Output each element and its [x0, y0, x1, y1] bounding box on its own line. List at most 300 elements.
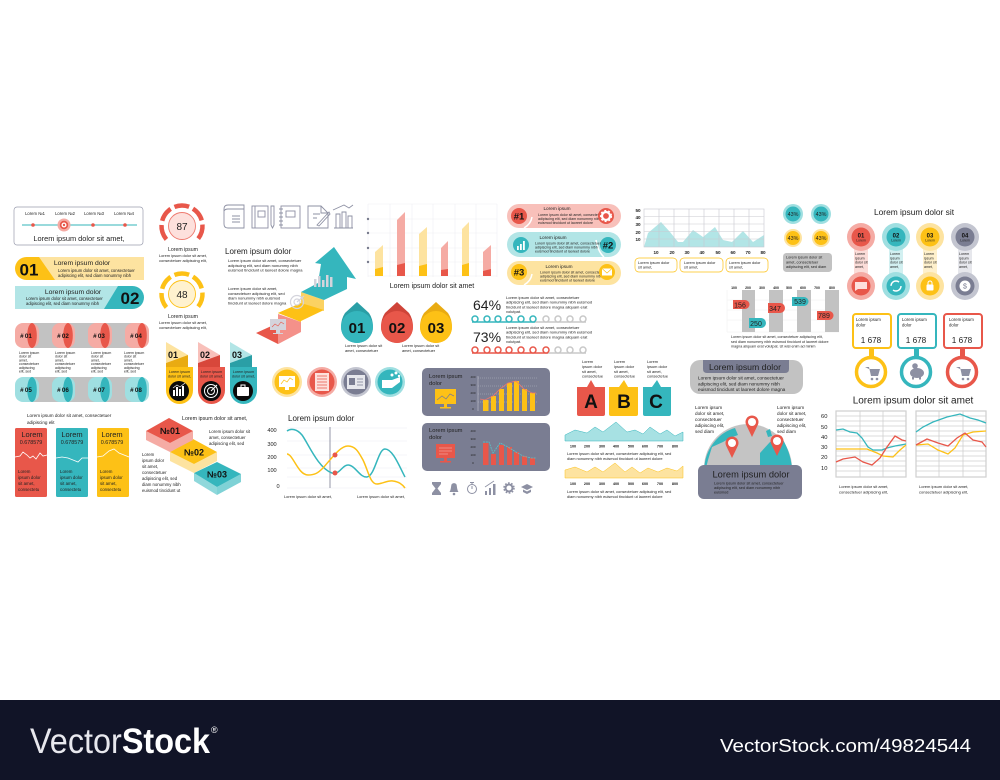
- globe side text: consectetuer: [777, 417, 804, 422]
- cylinder captions: adipiscing: [19, 366, 35, 370]
- isometric steps captions: amet, consectetuer: [209, 435, 246, 440]
- banner 01: dolor sit amet,: [168, 374, 191, 378]
- gauge 87: Lorem ipsum: [168, 247, 198, 253]
- cylinder captions: elit, sed: [19, 370, 31, 374]
- cylinder captions: amet,: [55, 358, 64, 362]
- area chart captions: sit amet,: [638, 266, 652, 270]
- chart: values on gray bars: 600: [800, 286, 806, 290]
- isometric steps captions: euismod tincidunt ut: [142, 488, 181, 493]
- step column 01: amet,: [855, 265, 864, 269]
- cylinder captions: adipiscing: [124, 366, 140, 370]
- isometric steps captions: Lorem ipsum dolor sit: [209, 429, 250, 434]
- pill #2: euismod tincidunt ut laoreet dolore: [535, 250, 590, 254]
- stat card yellow: [97, 428, 129, 497]
- area chart yellow: 400: [613, 482, 619, 486]
- panel: timeline: Lorem №2: [55, 211, 76, 216]
- area chart captions: Lorem ipsum dolor: [729, 261, 760, 265]
- panel: red bar chart: 0: [472, 461, 474, 465]
- area chart teal: 500: [628, 444, 634, 448]
- cylinders row 1: # 03: [93, 333, 105, 340]
- globe side text: dolor sit amet,: [695, 411, 724, 416]
- step 03: №03: [207, 470, 227, 480]
- area chart captions: [635, 258, 768, 272]
- progress 64%: [472, 295, 592, 322]
- area chart yellow: 300: [599, 482, 605, 486]
- cylinders row 2: # 07: [93, 387, 105, 394]
- icon: red monitor: [436, 444, 455, 462]
- cylinder captions: dolor sit: [55, 355, 67, 359]
- ribbon 02: adipiscing elit, sed diam nonummy nibh: [26, 301, 100, 306]
- icon: padlock: [926, 281, 934, 290]
- chart: values on gray bars: 500: [786, 286, 792, 290]
- line chart center: 100: [267, 468, 277, 474]
- cylinders row 1: # 02: [57, 333, 69, 340]
- banner 03: Lorem ipsum: [233, 370, 254, 374]
- chart: values on gray bars: 400: [773, 286, 779, 290]
- progress 73%: adipiscing elit, sed diam nonummy nibh euismod: [506, 330, 592, 335]
- line chart center: 0: [276, 484, 280, 490]
- box A: ipsum dolor: [582, 364, 603, 369]
- stat card yellow: consectetu: [100, 487, 122, 492]
- step column 04: dolor sit: [959, 261, 972, 265]
- cylinder captions: Lorem ipsum: [91, 351, 111, 355]
- icon: chart: [513, 237, 529, 253]
- cylinder captions: adipiscing: [91, 366, 107, 370]
- pill #2: Lorem ipsum dolor sit amet, consectetuer: [535, 242, 601, 246]
- icon: monitor badge: [272, 367, 302, 397]
- progress 64%: tincidunt ut laoreet dolore magna aliquam erat: [506, 304, 588, 309]
- pill #3: Lorem ipsum: [545, 264, 573, 269]
- icon: rising bars: [485, 481, 496, 495]
- box C: C: [649, 392, 663, 413]
- globe with pins: [704, 416, 792, 468]
- area chart teal: Lorem ipsum dolor sit amet, consectetuer adipiscing elit, sed: [567, 451, 671, 456]
- area chart teal: 400: [613, 444, 619, 448]
- progress 64%: 64%: [473, 297, 501, 313]
- area chart yellow: [565, 463, 683, 499]
- line chart left: 30: [821, 445, 827, 451]
- box B: B: [617, 392, 631, 413]
- pill #3: [507, 261, 621, 285]
- pill #2: Lorem ipsum: [539, 235, 567, 240]
- panel: yellow bar chart: 400: [470, 375, 476, 379]
- stat card red: Lorem: [21, 430, 43, 439]
- step column 03: ipsum: [924, 256, 934, 260]
- icon: refresh: [891, 281, 901, 291]
- gauge 87: consectetuer adipiscing elit,: [159, 258, 207, 263]
- ribbon 01: Lorem ipsum dolor: [54, 260, 111, 267]
- icon: document badge: [307, 367, 337, 397]
- drop 03: [420, 302, 452, 343]
- chart: values on gray bars: [727, 286, 839, 349]
- callout: globe bottom: [698, 465, 802, 499]
- step column 02: [882, 223, 910, 300]
- cylinder captions: amet,: [91, 358, 100, 362]
- line chart left: Lorem ipsum dolor sit amet,: [839, 484, 888, 489]
- chart: values on gray bars: 789: [818, 313, 830, 320]
- area chart teal: 600: [642, 444, 648, 448]
- pill #2: [507, 232, 621, 257]
- area chart: 80: [760, 250, 766, 255]
- text block: lorem ipsum dolor: tincidunt ut laoreet dolore magna: [228, 300, 287, 305]
- isometric steps captions: consectetuer: [142, 470, 167, 475]
- box B: Lorem: [614, 359, 625, 364]
- box A: [577, 359, 605, 416]
- line chart left: [821, 411, 906, 494]
- heading: right column: Lorem ipsum dolor sit: [874, 207, 955, 217]
- ribbon 01: Lorem ipsum dolor sit amet, consectetuer: [58, 268, 135, 273]
- line chart center: Lorem ipsum dolor: [288, 414, 355, 423]
- chart: values on gray bars: 156: [734, 302, 746, 309]
- area chart teal: diam nonummy nibh euismod tincidunt ut laoreet dolore: [567, 456, 663, 461]
- area chart: 50: [715, 250, 721, 255]
- progress 73%: 73%: [473, 329, 501, 345]
- chart: values on gray bars: 100: [731, 286, 737, 290]
- text block: lorem ipsum dolor: [225, 247, 303, 305]
- panel: timeline: Lorem №4: [114, 211, 135, 216]
- step column 02: Lorem: [891, 238, 901, 242]
- stat card teal: 0.678579: [61, 440, 83, 446]
- step column 02: 02: [893, 234, 900, 240]
- area chart: 20: [635, 230, 641, 235]
- globe side text: dolor sit amet,: [777, 411, 806, 416]
- area chart teal: 800: [672, 444, 678, 448]
- stat card red: 0.678579: [20, 440, 42, 446]
- drop captions: amet, consectetuer: [402, 348, 436, 353]
- step column 01: 01: [858, 234, 865, 240]
- chart: values on gray bars: 300: [759, 286, 765, 290]
- stat card teal: Lorem: [60, 469, 72, 474]
- stat card teal: sit amet,: [60, 481, 77, 486]
- cylinders row 2: [15, 377, 149, 402]
- gray note: adipiscing elit, sed diam: [786, 265, 826, 269]
- icon: hand badge: [375, 367, 405, 397]
- step column 01: Lorem: [855, 252, 865, 256]
- chart: values on gray bars: 250: [750, 321, 762, 328]
- pill #2: #2: [603, 240, 613, 252]
- area chart teal: 700: [657, 444, 663, 448]
- step column 03: dolor sit: [924, 261, 937, 265]
- text block: lorem ipsum dolor: diam nonummy nibh euismod: [228, 296, 280, 301]
- value box yellow: dolor: [856, 323, 866, 328]
- cylinder captions: elit, sed: [124, 370, 136, 374]
- pill #1: adipiscing elit, sed diam nonummy nibh: [538, 217, 601, 221]
- step column 04: ipsum: [959, 256, 969, 260]
- percent circles: 43%: [816, 236, 827, 242]
- pill #1: [507, 204, 621, 228]
- panel: timeline: Lorem №3: [84, 211, 105, 216]
- cylinder captions: dolor sit: [124, 355, 136, 359]
- isometric steps captions: ipsum dolor: [142, 458, 165, 463]
- line chart right: consectetuer adipiscing elit,: [919, 490, 968, 494]
- text block: lorem ipsum dolor: Lorem ipsum dolor sit amet,: [228, 286, 277, 291]
- area chart teal: 200: [584, 444, 590, 448]
- step column 03: Lorem: [925, 238, 935, 242]
- banner 02: dolor sit amet,: [200, 374, 223, 378]
- value box red: Lorem ipsum: [949, 317, 974, 322]
- box B: sit amet,: [614, 369, 629, 374]
- line chart center: 200: [267, 455, 277, 461]
- area chart: 50: [635, 208, 641, 213]
- logo: VectorStock: [30, 722, 210, 761]
- step column 01: Lorem: [856, 238, 866, 242]
- footer band: [0, 700, 1000, 780]
- line chart right: [916, 411, 986, 494]
- cylinders row 2: # 08: [130, 387, 142, 394]
- stat card yellow: Lorem: [100, 469, 112, 474]
- panel: red bar chart: 100: [470, 453, 476, 457]
- line chart left: 40: [821, 435, 827, 441]
- text block: lorem ipsum dolor: Lorem ipsum dolor: [225, 247, 292, 256]
- cylinder captions: consectetuer: [124, 362, 145, 366]
- box C: [643, 359, 671, 416]
- cylinders row 1: # 01: [20, 333, 32, 340]
- gauge 48: consectetuer adipiscing elit,: [159, 325, 207, 330]
- panel: yellow bar chart: [422, 368, 550, 416]
- cylinder captions: consectetuer: [19, 362, 40, 366]
- stat cards heading: [27, 413, 112, 425]
- value box yellow: Lorem ipsum: [856, 317, 881, 322]
- panel: timeline: [14, 207, 143, 245]
- progress 64%: adipiscing elit, sed diam nonummy nibh euismod: [506, 300, 592, 305]
- cylinders row 1: [15, 323, 149, 348]
- ribbon 02: Lorem ipsum dolor: [45, 289, 102, 296]
- panel: yellow bar chart: 300: [470, 383, 476, 387]
- ribbon 02: 02: [121, 289, 139, 308]
- area chart yellow: diam nonummy nibh euismod tincidunt ut laoreet dolore: [567, 494, 663, 499]
- area chart captions: sit amet,: [729, 266, 743, 270]
- area chart: [635, 208, 766, 255]
- chart: values on gray bars: magna aliquam erat volutpat. Ut wisi enim ad minim: [731, 345, 815, 349]
- icon: stopwatch: [468, 482, 476, 494]
- panel: yellow bar chart: 200: [470, 391, 476, 395]
- icon: notebook and pencil: [252, 206, 274, 228]
- stat card yellow: 0.678579: [101, 440, 123, 446]
- icon: piggy bank: [910, 363, 924, 380]
- globe side text: Lorem ipsum: [777, 405, 804, 410]
- heading: line charts: Lorem ipsum dolor sit amet: [853, 396, 974, 406]
- globe side text: sed diam: [695, 429, 714, 434]
- value box teal: 1 678: [906, 336, 927, 345]
- pill #1: Lorem ipsum: [543, 206, 571, 211]
- value box teal: [898, 314, 936, 386]
- line chart left: 10: [821, 466, 827, 472]
- area chart captions: Lorem ipsum dolor: [638, 261, 669, 265]
- cylinder captions: consectetuer: [91, 362, 112, 366]
- stat card yellow: Lorem: [101, 430, 123, 439]
- isometric steps captions: diam nonummy nibh: [142, 482, 181, 487]
- icon: hourglass: [432, 482, 441, 495]
- banner 02: [198, 342, 225, 404]
- pill #3: euismod tincidunt ut laoreet dolore: [540, 279, 595, 283]
- area chart yellow: 700: [657, 482, 663, 486]
- gauge 87: Lorem ipsum dolor sit amet,: [159, 253, 207, 258]
- drop captions: Lorem ipsum dolor sit: [402, 343, 439, 348]
- panel: timeline: Lorem №1: [25, 211, 46, 216]
- panel: red bar chart: [422, 423, 550, 471]
- progress 64%: Lorem ipsum dolor sit amet, consectetuer: [506, 295, 579, 300]
- panel: yellow bar chart: 0: [472, 407, 474, 411]
- box A: Lorem: [582, 359, 593, 364]
- pill #3: Lorem ipsum dolor sit amet, consectetuer: [540, 270, 606, 274]
- stat cards heading: Lorem ipsum dolor sit amet, consectetuer: [27, 413, 112, 418]
- progress 73%: Lorem ipsum dolor sit amet, consectetuer: [506, 325, 579, 330]
- pill #3: #3: [514, 268, 524, 278]
- icon: yellow monitor: [435, 389, 456, 408]
- step column 02: Lorem: [890, 252, 900, 256]
- pill #1: #1: [514, 212, 525, 222]
- step column 02: ipsum: [890, 256, 900, 260]
- panel: yellow bar chart: 100: [470, 399, 476, 403]
- area chart: 30: [635, 222, 641, 227]
- icon: dollar coin: $: [963, 284, 967, 290]
- panel: red bar chart: Lorem ipsum: [429, 428, 463, 434]
- callout: globe bottom: adipiscing elit, sed diam nonummy nibh: [714, 486, 780, 490]
- box A: sit amet,: [582, 369, 597, 374]
- callout: globe top: [690, 360, 803, 394]
- line chart center: Lorem ipsum dolor sit amet,: [284, 494, 332, 499]
- isometric steps captions: adipiscing elit, sed: [209, 441, 245, 446]
- drop 03: 03: [428, 320, 444, 337]
- stat card red: consectetu: [18, 487, 40, 492]
- value box red: dolor: [949, 323, 959, 328]
- cylinders row 2: # 06: [57, 387, 69, 394]
- gray note: Lorem ipsum dolor sit: [786, 256, 822, 260]
- callout: globe top: Lorem ipsum dolor sit amet, consectetuer: [698, 376, 784, 380]
- step column 01: dolor sit: [855, 261, 868, 265]
- panel: red bar chart: 300: [470, 437, 476, 441]
- pin: [726, 437, 738, 458]
- area chart yellow: 600: [642, 482, 648, 486]
- step column 04: Lorem: [959, 252, 969, 256]
- image id: VectorStock.com/49824544: [720, 736, 971, 756]
- area chart captions: Lorem ipsum dolor: [684, 261, 715, 265]
- area chart yellow: 500: [628, 482, 634, 486]
- globe side text: sed diam: [777, 429, 796, 434]
- step column 01: [847, 223, 875, 300]
- stat cards heading: adipiscing elit: [27, 420, 55, 425]
- chart: values on gray bars: Lorem ipsum dolor sit amet, consectetuer adipiscing elit,: [731, 335, 823, 339]
- stat card yellow: ipsum dolor: [100, 475, 123, 480]
- pin: [746, 416, 758, 437]
- drop 01: 01: [349, 320, 365, 337]
- drop captions: [345, 343, 440, 353]
- ribbon 01: adipiscing elit, sed diam nonummy nibh: [58, 273, 132, 278]
- gray note: amet, consectetuer: [786, 260, 819, 264]
- icon: target: [290, 296, 304, 308]
- value box red: 1 678: [952, 336, 973, 345]
- drop 01: [341, 302, 373, 343]
- area chart: 20: [669, 250, 675, 255]
- percent circles: [783, 204, 831, 247]
- cylinder captions: [19, 351, 145, 374]
- globe side text: [695, 405, 806, 434]
- cylinder captions: elit, sed: [55, 370, 67, 374]
- percent circles: 43%: [788, 212, 799, 218]
- isometric steps captions: adipiscing elit, sed: [142, 476, 178, 481]
- icon: cart: [865, 367, 880, 380]
- box C: ipsum dolor: [647, 364, 668, 369]
- isometric steps captions: Lorem: [142, 452, 154, 457]
- icon: spiral notebook: [279, 206, 300, 228]
- bar chart: slanted bars: [367, 204, 497, 290]
- icon: message: [855, 282, 867, 291]
- icon: bell: [450, 483, 458, 495]
- box A: A: [584, 392, 598, 413]
- progress 64%: volutpat.: [506, 309, 521, 314]
- callout: globe top: Lorem ipsum dolor: [709, 362, 781, 372]
- gauge 48: 48: [176, 290, 188, 301]
- step column 04: Lorem: [960, 238, 970, 242]
- line chart center: 300: [267, 442, 277, 448]
- box A: consectetue: [582, 374, 603, 379]
- stat card red: ipsum dolor: [18, 475, 41, 480]
- stat card teal: ipsum dolor: [60, 475, 83, 480]
- line chart left: 50: [821, 425, 827, 431]
- chart: values on gray bars: sed diam nonummy nibh euismod tincidunt ut laoreet dolore: [731, 340, 829, 344]
- icon: gear: [598, 208, 614, 224]
- banner 02: 02: [200, 350, 210, 360]
- value box red: [944, 314, 982, 386]
- cylinders row 1: # 04: [130, 333, 142, 340]
- area chart: 70: [745, 250, 751, 255]
- progress 73%: tincidunt ut laoreet dolore magna aliquam erat: [506, 334, 588, 339]
- chart: values on gray bars: 800: [829, 286, 835, 290]
- icon: mini bars: [314, 275, 332, 287]
- icon: envelope: [599, 264, 615, 280]
- value box yellow: [853, 314, 891, 386]
- box B: consectetue: [614, 374, 635, 379]
- area chart: 10: [653, 250, 659, 255]
- cylinders row 2: # 05: [20, 387, 32, 394]
- area chart teal: 100: [570, 444, 576, 448]
- globe side text: adipiscing elit,: [777, 423, 806, 428]
- step column 03: 03: [927, 234, 934, 240]
- ribbon 02: Lorem ipsum dolor sit amet, consectetuer: [26, 296, 103, 301]
- step 02: №02: [184, 448, 204, 458]
- cylinder captions: Lorem ipsum: [124, 351, 144, 355]
- icon: gear: [504, 483, 514, 493]
- area chart: 30: [684, 250, 690, 255]
- area chart yellow: Lorem ipsum dolor sit amet, consectetuer adipiscing elit, sed: [567, 489, 671, 494]
- pin: [770, 435, 784, 456]
- line chart right: Lorem ipsum dolor sit amet,: [919, 484, 968, 489]
- drop 02: 02: [389, 320, 405, 337]
- step column 03: Lorem: [924, 252, 934, 256]
- line chart center: Lorem ipsum dolor sit amet,: [357, 494, 405, 499]
- callout: globe bottom: euismod: [714, 491, 728, 495]
- stat card teal: Lorem: [61, 430, 83, 439]
- icon: id card badge: [341, 367, 371, 397]
- banner 01: [166, 342, 193, 404]
- icon: cart: [956, 367, 971, 380]
- icon: book: [224, 205, 244, 228]
- globe side text: adipiscing elit,: [695, 423, 724, 428]
- banner 02: Lorem ipsum: [201, 370, 222, 374]
- banner 03: 03: [232, 350, 242, 360]
- panel: red bar chart: 200: [470, 445, 476, 449]
- progress 73%: volutpat.: [506, 339, 521, 344]
- bar chart: slanted bars: Lorem ipsum dolor sit amet: [390, 283, 474, 290]
- icon: monitor: [270, 319, 286, 334]
- panel: yellow bar chart: Lorem ipsum: [429, 374, 463, 380]
- ribbon 02: [15, 286, 144, 309]
- stat card red: Lorem: [18, 469, 30, 474]
- isometric steps captions: [142, 416, 251, 493]
- isometric steps captions: sit amet,: [142, 464, 158, 469]
- step 01: №01: [160, 426, 180, 436]
- cylinder captions: amet,: [124, 358, 133, 362]
